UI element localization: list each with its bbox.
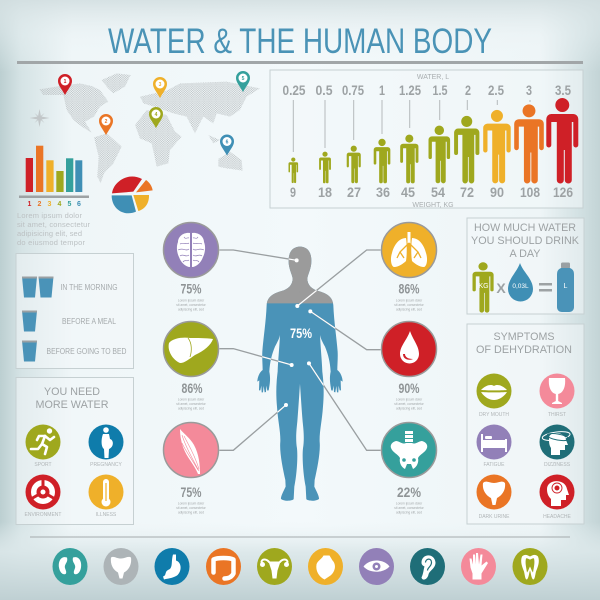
organ captions: sit amet, consectetur <box>394 402 425 406</box>
pin 4: 4 <box>155 112 158 118</box>
lorem text block <box>17 211 90 247</box>
organ captions: sit amet, consectetur <box>176 303 207 307</box>
icon: intestines <box>206 548 241 585</box>
labels: DRY MOUTH <box>479 412 509 418</box>
organ captions: adipiscing elit, sed <box>396 406 422 410</box>
title: WATER & THE HUMAN BODY <box>108 22 492 61</box>
water litre labels: 0.5 <box>316 82 333 98</box>
icon: environment <box>26 474 60 510</box>
water litre labels: 2.5 <box>488 82 504 98</box>
connector lines <box>219 250 381 450</box>
weight labels: 18 <box>318 184 332 200</box>
weight labels: 72 <box>460 184 474 200</box>
icon: kidneys <box>52 548 88 585</box>
organ percentages: 22% <box>397 485 421 500</box>
dotted continents <box>39 73 260 183</box>
drink labels: IN THE MORNING <box>60 282 118 292</box>
heading: YOU SHOULD DRINK <box>471 235 580 247</box>
organ captions: Lorem ipsum dolor <box>178 298 205 302</box>
panel: water by weight chart: WATER, L <box>417 74 449 81</box>
cup meal <box>22 310 37 332</box>
pin 6 <box>220 134 234 156</box>
human body figure with connectors <box>219 247 381 501</box>
bar chart: 6 <box>77 201 81 208</box>
icon: water drop: 0,03L <box>512 283 529 290</box>
labels: ILLNESS <box>96 512 117 518</box>
water litre labels: 1.25 <box>399 82 421 98</box>
pin 5: 5 <box>242 76 245 82</box>
heading: A DAY <box>510 248 541 260</box>
heading: HOW MUCH WATER <box>474 222 576 234</box>
icon: bladder <box>104 548 138 585</box>
leader lines <box>293 100 530 152</box>
organ: muscle <box>164 422 218 478</box>
heading: OF DEHYDRATION <box>476 344 572 356</box>
water litre labels: 0.25 <box>282 82 306 98</box>
panel: symptoms of dehydration <box>467 324 584 524</box>
water litre labels: 2 <box>465 82 471 98</box>
connector dots <box>284 258 312 407</box>
bar chart: 5 <box>68 201 72 208</box>
organ percentages: 86% <box>398 282 420 296</box>
labels <box>479 412 572 520</box>
heading <box>471 222 580 260</box>
lorem text block: sit amet, consectetur <box>17 220 90 229</box>
pin 6: 6 <box>226 140 229 146</box>
panel: you need more water <box>16 378 134 524</box>
weight labels: 90 <box>490 184 504 200</box>
weight labels: 54 <box>431 184 445 200</box>
icon: headache <box>540 474 574 510</box>
organ captions: Lorem ipsum dolor <box>396 298 423 302</box>
organ captions: Lorem ipsum dolor <box>396 502 423 506</box>
lorem text block: adipisicing elit, sed <box>17 229 82 238</box>
organ captions: sit amet, consectetur <box>394 303 425 307</box>
pin 2: 2 <box>105 119 108 125</box>
organ captions: Lorem ipsum dolor <box>396 398 423 402</box>
weight labels: 45 <box>401 184 415 200</box>
organ: liver <box>164 322 218 376</box>
water litre labels: 0.75 <box>342 82 364 98</box>
weight labels: 27 <box>347 184 361 200</box>
cup bed <box>22 340 37 362</box>
weight labels: 9 <box>290 184 296 200</box>
icon: illness <box>88 474 124 510</box>
organ captions: sit amet, consectetur <box>394 506 425 510</box>
pin 1 <box>58 74 72 95</box>
weight labels: 126 <box>553 184 573 200</box>
weight labels: 36 <box>376 184 390 200</box>
lorem text block: do eiusmod tempor <box>17 238 86 247</box>
organ percentages: 90% <box>398 381 420 396</box>
panel: water by weight chart <box>270 70 583 209</box>
cups morning <box>22 276 54 298</box>
organ captions: adipiscing elit, sed <box>178 406 204 410</box>
heading: MORE WATER <box>36 399 109 411</box>
pin 5 <box>236 71 250 92</box>
organ captions: adipiscing elit, sed <box>396 510 422 514</box>
icon: hand <box>461 548 496 585</box>
pie chart <box>112 176 153 213</box>
labels: FATIGUE <box>483 462 505 468</box>
bar chart: 2 <box>38 201 42 208</box>
icon: stomach <box>154 548 190 585</box>
heading <box>476 331 572 356</box>
icon: pregnancy <box>88 424 124 460</box>
heading: SYMPTOMS <box>494 331 554 343</box>
water litre labels <box>282 82 571 98</box>
pin 2 <box>99 114 113 135</box>
organ captions: adipiscing elit, sed <box>178 308 204 312</box>
icon: fatigue <box>476 424 512 460</box>
world map with location pins <box>30 71 260 183</box>
bar chart <box>19 146 89 208</box>
labels: DARK URINE <box>479 514 510 520</box>
lorem text block: Lorem ipsum dolor <box>17 211 82 220</box>
organ percentages: 86% <box>182 381 202 396</box>
icon: uterus <box>257 548 292 585</box>
heading <box>36 386 109 411</box>
icon: sport <box>26 424 60 460</box>
icon: ear <box>410 548 445 585</box>
drink labels: BEFORE A MEAL <box>62 316 116 326</box>
multiply sign: X <box>496 280 506 296</box>
labels: DIZZINESS <box>544 462 571 468</box>
pin 3: 3 <box>159 82 162 88</box>
icon: tooth <box>512 548 548 585</box>
organ captions: Lorem ipsum dolor <box>178 502 205 506</box>
organ: blood drop <box>382 322 436 376</box>
labels: ENVIRONMENT <box>25 512 61 518</box>
water litre labels: 1 <box>379 82 385 98</box>
weight labels: 108 <box>520 184 540 200</box>
icon: dark urine <box>476 474 512 510</box>
labels <box>25 462 122 518</box>
water litre labels: 1.5 <box>432 82 448 98</box>
equals sign <box>539 283 552 292</box>
bottom organ icon row <box>52 548 548 585</box>
labels: HEADACHE <box>543 514 572 520</box>
weight labels <box>290 184 573 200</box>
organ: brain <box>164 222 218 278</box>
bar chart: 1 <box>28 201 32 208</box>
organ captions: Lorem ipsum dolor <box>178 398 205 402</box>
water litre labels: 3.5 <box>555 82 571 98</box>
labels: THIRST <box>548 412 566 418</box>
icon: heart <box>308 548 343 585</box>
heading: YOU NEED <box>44 386 100 398</box>
person figures <box>288 98 578 184</box>
body water percent: 75% <box>290 325 312 341</box>
panel: water by weight chart: WEIGHT, KG <box>412 202 454 209</box>
organ percentages <box>180 282 421 500</box>
drink labels <box>46 282 126 356</box>
water litre labels: 3 <box>526 82 532 98</box>
icon: thirst <box>540 374 574 408</box>
labels: PREGNANCY <box>90 462 122 468</box>
icon: compass <box>30 109 50 127</box>
organ percentages: 75% <box>180 282 202 296</box>
drink labels: BEFORE GOING TO BED <box>46 346 126 356</box>
pin 1: 1 <box>64 79 67 85</box>
bar chart: 3 <box>48 201 52 208</box>
organ: lungs <box>382 222 436 278</box>
labels: SPORT <box>34 462 52 468</box>
organ captions: sit amet, consectetur <box>176 506 207 510</box>
icon: dry mouth <box>476 374 512 408</box>
bar chart: 4 <box>58 201 62 208</box>
organ captions: adipiscing elit, sed <box>396 308 422 312</box>
pin 4 <box>149 107 163 128</box>
panel: when to drink <box>16 254 134 368</box>
organ captions: adipiscing elit, sed <box>178 510 204 514</box>
pin 3 <box>153 77 167 98</box>
panel: how much water per day <box>467 218 584 314</box>
organ captions <box>176 298 425 514</box>
body silhouette <box>257 247 343 501</box>
organ percentages: 75% <box>180 485 202 500</box>
organ captions: sit amet, consectetur <box>176 402 207 406</box>
icon: bottle: L <box>564 283 568 290</box>
icon: person kg: KG <box>478 283 489 290</box>
organ: pelvis <box>382 422 436 478</box>
icon: dizziness <box>540 424 574 460</box>
icon: eye <box>359 548 394 585</box>
